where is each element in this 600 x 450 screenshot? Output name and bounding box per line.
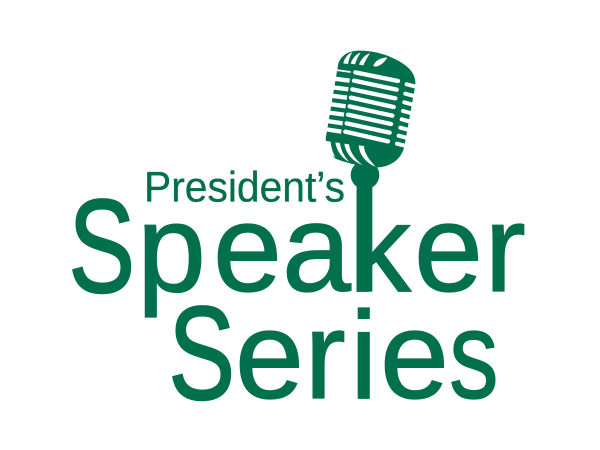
final letter s: s [449,285,499,425]
text: Speaker [68,172,526,320]
letter S of Series: S [168,279,235,427]
right grille openings [397,84,418,147]
left grille openings [322,70,351,132]
icon: microphone [322,51,418,292]
upper vents [343,52,387,67]
lower vents [323,141,376,167]
central grille slats [345,72,398,141]
text: President's: President’s [144,164,345,212]
microphone stem [351,161,379,292]
letters peaker: peaker [137,180,526,318]
microphone body [326,51,415,167]
letters erie: erie [235,287,449,425]
k stem overlay [356,190,372,291]
text: Series [168,279,499,427]
letter S of Speaker: S [68,172,135,320]
